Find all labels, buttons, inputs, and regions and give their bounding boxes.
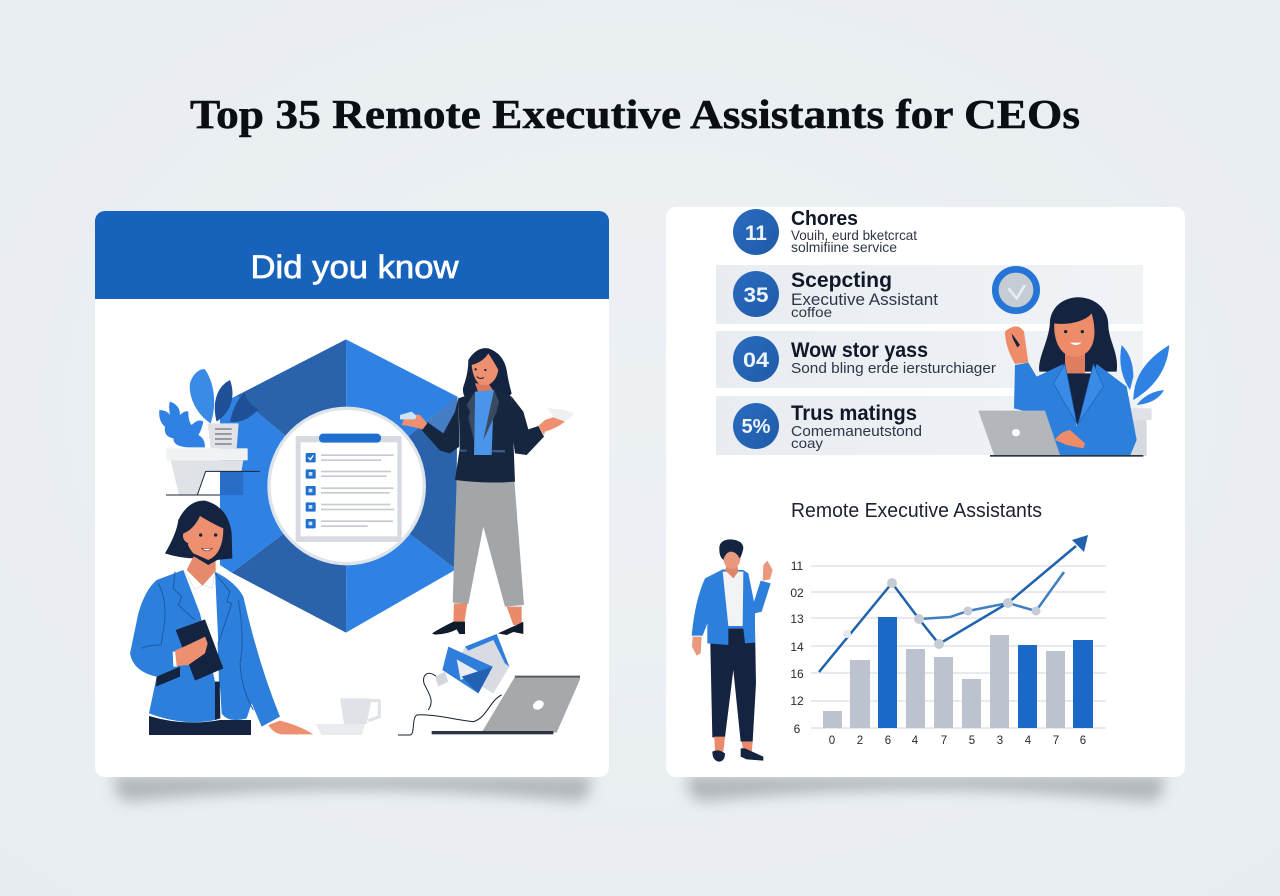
stat row 2: Scepcting [791,269,892,292]
stat row 2: Executive Assistant [791,290,938,309]
standing woman upper body [400,348,574,483]
y axis labels: 13 [790,612,804,626]
chart heading: Remote Executive Assistants [791,500,1042,522]
stat row 4: Comemaneutstond [791,423,922,440]
checklist circle [269,408,424,564]
x axis labels: 5 [969,735,975,747]
y axis labels: 11 [791,559,804,573]
y axis labels: 16 [790,667,804,681]
stat row 3: Sond bling erde iersturchiager [791,360,996,377]
x axis labels: 7 [941,735,947,747]
coffee cup [316,698,379,735]
stat row 3 [733,336,996,382]
trend arrowhead [1072,535,1088,552]
y axis labels: 14 [790,640,804,654]
stat row 1: solmifiine service [791,239,897,255]
stat row 3: 04 [743,349,769,372]
stat row 1: Vouih, eurd bketcrcat [791,227,917,243]
illustration: left panel scene [130,339,580,735]
panel: right statistics and chart [666,207,1185,802]
stat row 2 [733,269,938,320]
y axis labels: 12 [790,694,804,708]
stat row 4: coay [791,435,823,451]
bars [823,617,1093,728]
stat row 4 [733,402,922,451]
hexagon [220,339,457,633]
stat row 3: Wow stor yass [791,339,928,362]
x axis labels: 2 [857,735,863,747]
title: Top 35 Remote Executive Assistants for CEOs [190,91,1080,137]
panel header: Did you know [250,249,459,285]
chart: combined bar and line chart [790,535,1106,747]
x axis labels: 4 [1025,735,1032,747]
x axis labels: 3 [997,735,1003,747]
x axis labels [829,735,1086,747]
panel: did you know [95,211,609,802]
stat row 2: coffoe [791,304,832,320]
stat row 4: Trus matings [791,402,917,425]
legs of standing woman [432,480,524,635]
plant [1112,345,1169,456]
plant on shelf [159,369,260,495]
stat row 1 [733,208,917,255]
x axis labels: 7 [1053,735,1059,747]
stat row 1: Chores [791,208,858,230]
gridlines [811,566,1106,728]
trend lines [819,546,1076,672]
laptop [978,411,1143,457]
x axis labels: 0 [829,735,835,747]
y axis labels [790,559,804,736]
y axis labels: 02 [790,586,804,600]
icon: floating ring [995,269,1037,311]
row bands [716,265,1143,455]
woman figure [1005,297,1137,456]
illustration: standing man [692,539,773,762]
x axis labels: 6 [1080,735,1086,747]
stat row 1: 11 [745,222,767,245]
x axis labels: 4 [912,735,919,747]
seated woman with tablet [130,501,313,735]
stat row 2: 35 [744,284,769,307]
laptop and envelopes [398,634,580,735]
illustration: woman with laptop [978,269,1169,457]
stat row 4: 5% [742,416,771,438]
y axis labels: 6 [794,722,801,736]
panel header [95,211,609,299]
x axis labels: 6 [885,735,891,747]
data markers [843,578,1040,649]
